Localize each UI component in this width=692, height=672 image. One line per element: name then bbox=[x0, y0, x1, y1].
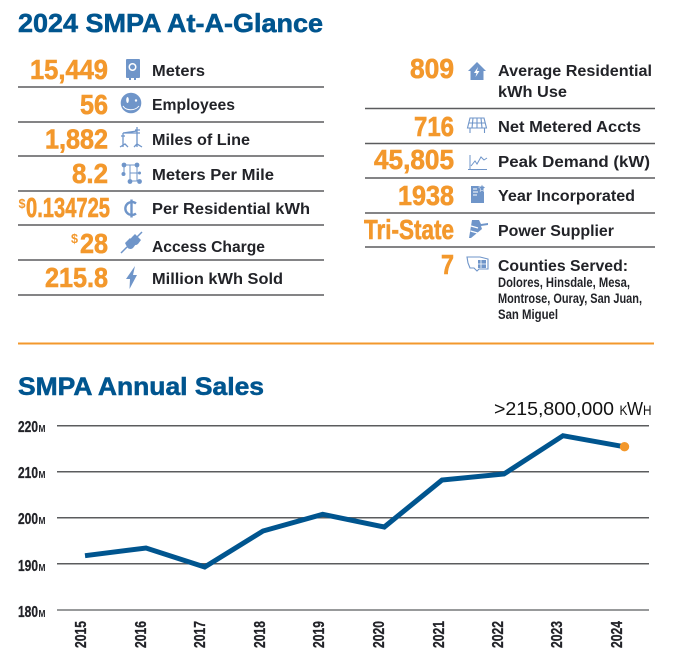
callout: 2024 total: W bbox=[627, 399, 643, 419]
title: 2024 SMPA At-A-Glance bbox=[18, 8, 323, 38]
callout: 2024 total: H bbox=[643, 403, 652, 418]
sales line bbox=[85, 436, 624, 567]
stat: access charge: Access Charge bbox=[152, 239, 265, 256]
stat: meters per mile bbox=[18, 158, 324, 191]
stat: peak demand: Peak Demand (kW) bbox=[498, 154, 650, 171]
stat: per residential kWh: Per Residential kWh bbox=[152, 201, 310, 218]
stat: employees bbox=[18, 89, 324, 122]
stat: per residential kWh bbox=[18, 192, 324, 225]
stat: year incorporated: Year Incorporated bbox=[498, 188, 635, 205]
x-axis year labels: 2023 bbox=[549, 621, 566, 648]
chart: annual sales line chart bbox=[18, 399, 652, 648]
stat: miles of line: 1,882 bbox=[45, 124, 108, 154]
stat: counties served bbox=[441, 249, 642, 322]
stat: net metered accounts bbox=[365, 111, 655, 144]
stat: net metered accounts: 716 bbox=[414, 111, 454, 142]
stat: meters per mile: Meters Per Mile bbox=[152, 167, 274, 184]
x-axis year labels: 2016 bbox=[133, 621, 150, 648]
stat: counties served: Dolores, Hinsdale, Mesa, bbox=[498, 275, 630, 290]
y-axis labels: 200 bbox=[18, 511, 38, 528]
callout: 2024 total: K bbox=[620, 403, 628, 418]
stat: access charge: $ bbox=[71, 231, 79, 246]
stat: year incorporated bbox=[365, 180, 655, 213]
y-axis labels: M bbox=[38, 516, 46, 527]
x-axis year labels: 2021 bbox=[431, 621, 448, 648]
stat: meters bbox=[18, 54, 324, 87]
stat: access charge bbox=[18, 228, 324, 260]
stat: average residential use bbox=[365, 53, 655, 108]
panel: right statistics column bbox=[364, 53, 655, 322]
x-axis year labels bbox=[73, 621, 626, 648]
x-axis year labels: 2020 bbox=[371, 621, 388, 648]
stat: peak demand: 45,805 bbox=[374, 144, 454, 175]
x-axis year labels: 2018 bbox=[252, 621, 269, 648]
x-axis year labels: 2019 bbox=[311, 621, 328, 648]
stat: million kWh sold bbox=[18, 262, 324, 295]
stat: counties served: Counties Served: bbox=[498, 258, 628, 275]
chart heading: SMPA Annual Sales bbox=[18, 373, 264, 401]
stat: million kWh sold: 215.8 bbox=[45, 262, 108, 293]
stat: meters: 15,449 bbox=[30, 54, 108, 85]
stat: net metered accounts: Net Metered Accts bbox=[498, 119, 641, 136]
stat: employees: 56 bbox=[80, 89, 108, 120]
y-axis labels: 210 bbox=[18, 465, 38, 482]
2024 end-point marker bbox=[620, 442, 629, 451]
stat: counties served: Montrose, Ouray, San Juan, bbox=[498, 291, 642, 306]
stat: counties served: San Miguel bbox=[498, 307, 558, 322]
stat: average residential use: 809 bbox=[410, 53, 454, 84]
stat: miles of line: Miles of Line bbox=[152, 132, 250, 149]
stat: per residential kWh: $ bbox=[18, 196, 26, 211]
x-axis year labels: 2015 bbox=[73, 621, 90, 648]
stat: meters: Meters bbox=[152, 63, 205, 80]
stat: year incorporated: 1938 bbox=[398, 180, 454, 211]
stat: miles of line bbox=[18, 124, 324, 156]
stat: employees: Employees bbox=[152, 97, 235, 114]
y-axis labels: 190 bbox=[18, 558, 38, 575]
stat: per residential kWh: 0.134725 bbox=[26, 192, 110, 223]
callout: 2024 total: >215,800,000 bbox=[494, 399, 614, 419]
stat: power supplier: Tri-State bbox=[364, 214, 454, 245]
panel: left statistics column bbox=[18, 54, 324, 295]
y-axis labels: M bbox=[38, 424, 46, 435]
stat: access charge: 28 bbox=[80, 228, 108, 259]
y-axis labels: M bbox=[38, 563, 46, 574]
stat: peak demand bbox=[365, 144, 655, 178]
y-axis labels: M bbox=[38, 609, 46, 620]
stat: power supplier bbox=[364, 214, 655, 247]
stat: counties served: 7 bbox=[441, 249, 454, 280]
stat: meters per mile: 8.2 bbox=[72, 158, 108, 189]
stat: million kWh sold: Million kWh Sold bbox=[152, 271, 283, 288]
y-axis labels: M bbox=[38, 470, 46, 481]
x-axis year labels: 2024 bbox=[609, 621, 626, 648]
y-axis labels bbox=[18, 419, 46, 621]
y-axis labels: 220 bbox=[18, 419, 38, 436]
stat: power supplier: Power Supplier bbox=[498, 223, 614, 240]
y-axis labels: 180 bbox=[18, 604, 38, 621]
x-axis year labels: 2017 bbox=[192, 621, 209, 648]
stat: average residential use: kWh Use bbox=[498, 84, 567, 101]
stat: average residential use: Average Residential bbox=[498, 63, 652, 80]
x-axis year labels: 2022 bbox=[490, 621, 507, 648]
